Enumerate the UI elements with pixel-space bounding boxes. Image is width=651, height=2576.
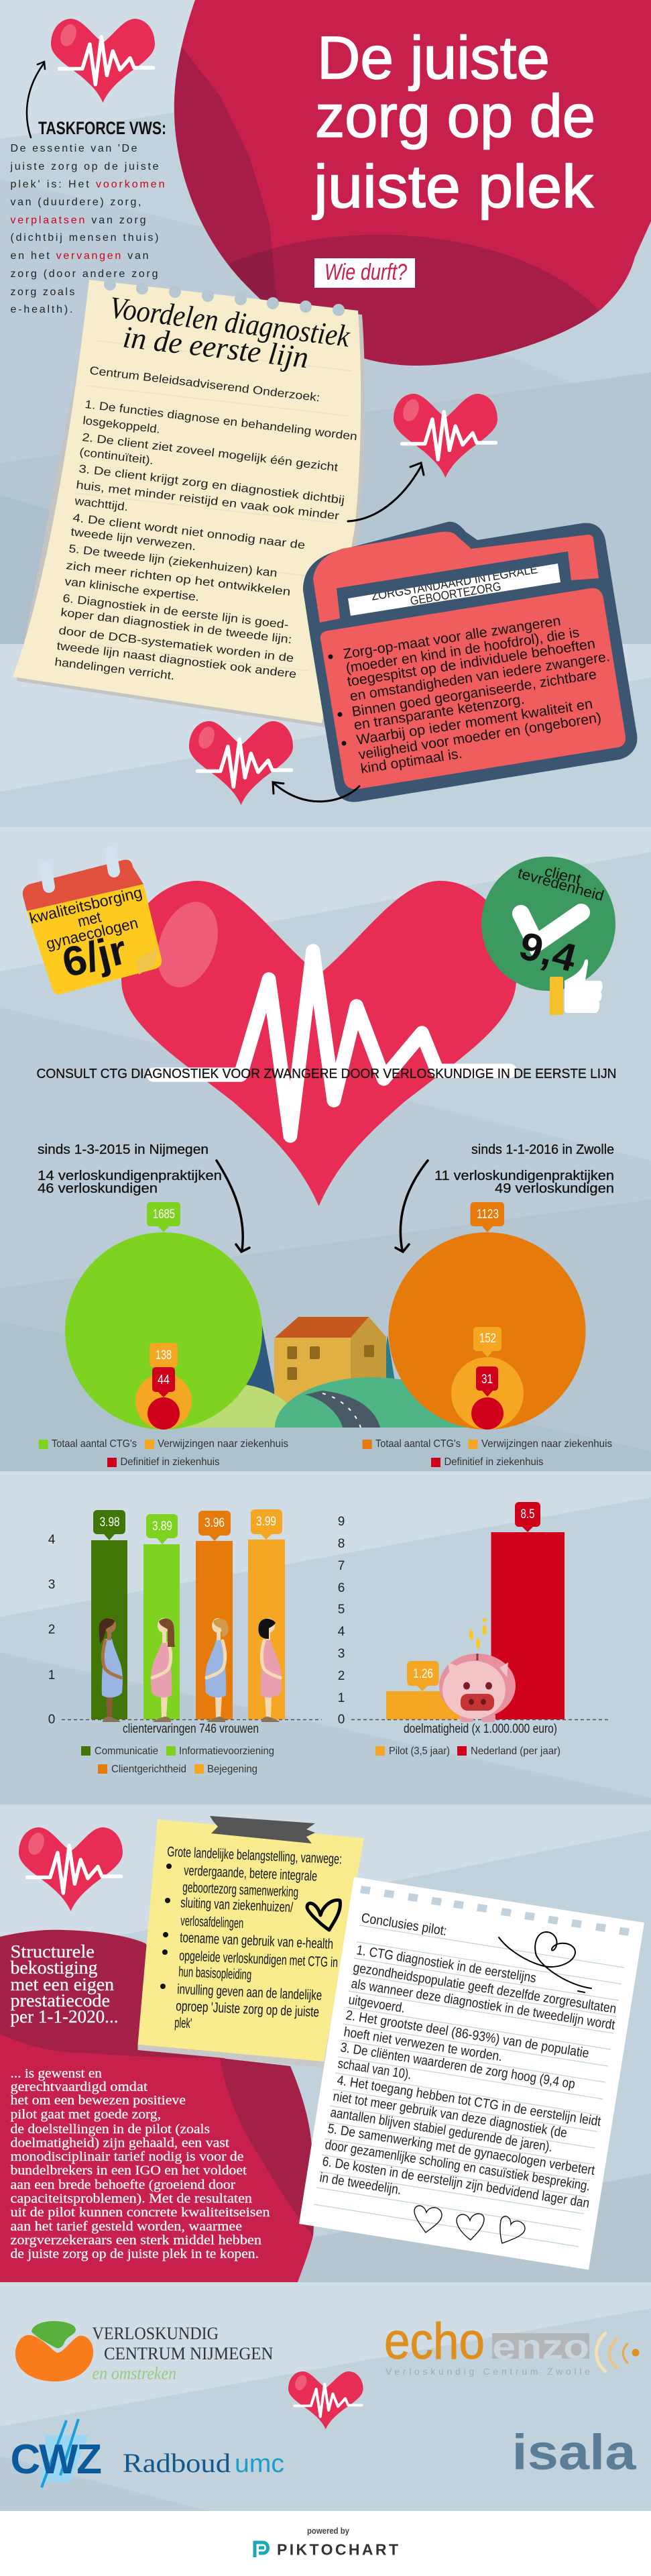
icon: pregnant woman 1	[99, 1618, 123, 1722]
section 3 background	[0, 1471, 651, 1805]
big heart	[121, 881, 516, 1206]
tooltip 3.98: 3.98	[100, 1515, 120, 1529]
text block: voordelen list: 3. De client krijgt zorg en diagnostiek dichtbij	[78, 462, 345, 506]
icon: heart top	[51, 19, 155, 103]
folder bullet text: Waarbij op ieder moment kwaliteit en	[355, 696, 594, 748]
text block: is gewenst: zorgverzekeraars een sterk middel hebben	[11, 2233, 261, 2248]
text block: taskforce: De essentie van 'De	[11, 143, 137, 154]
note text: oproep 'Juiste zorg op de juiste	[176, 1998, 320, 2020]
heading: structurele bekostiging: met een eigen	[11, 1974, 115, 1994]
tooltip 152: 152	[479, 1332, 496, 1346]
folder bullet text: Zorg-op-maat voor alle zwangeren	[342, 613, 562, 662]
conclusies text: Conclusies pilot:	[360, 1911, 448, 1939]
logo: radboudumc: umc	[235, 2450, 284, 2478]
text block: voordelen list: 2. De client ziet zoveel mogelijk één gezicht	[82, 431, 339, 474]
note text: plek'	[174, 2015, 192, 2031]
tear squares	[360, 1886, 630, 1936]
title: De juiste	[317, 25, 550, 92]
heading: voordelen: Voordelen diagnostiek	[108, 290, 353, 354]
button: wie durft	[314, 258, 415, 288]
icon: pregnant woman 4	[258, 1618, 282, 1722]
icon: calendar kwaliteitsborging	[23, 852, 162, 995]
tooltip 138	[150, 1343, 178, 1373]
legend: zwolle: Totaal aantal CTG's	[375, 1438, 461, 1450]
legend: zwolle	[363, 1438, 612, 1468]
conclusies text: als wanneer deze diagnostiek in de tweedelijn wordt	[350, 1976, 616, 2033]
text block: voordelen list: wachttijd.	[73, 494, 129, 513]
folder label: ZORGSTANDAARD INTEGRALE	[370, 562, 538, 603]
text block: taskforce	[9, 143, 165, 315]
tooltip 1685	[147, 1202, 180, 1232]
axis: 1	[338, 1691, 345, 1705]
title: zorg op de	[315, 83, 595, 150]
tooltip 1123	[471, 1202, 504, 1232]
axis: 4	[48, 1533, 56, 1547]
paper holes	[104, 278, 345, 316]
logo: radboudumc	[123, 2448, 284, 2478]
text block: voordelen list: (continuïteit).	[79, 445, 154, 467]
section 5 background	[0, 2282, 651, 2511]
axis: 2	[48, 1623, 55, 1637]
section 4 background	[0, 1805, 651, 2282]
folder bullet text: en omstandigheden van iedere zwangere.	[349, 649, 611, 704]
conclusies text	[318, 1911, 617, 2211]
note text: sluiting van ziekenhuizen/	[180, 1895, 294, 1915]
note text: hun basisopleiding	[178, 1964, 252, 1983]
bars	[386, 1532, 565, 1719]
text block: nijmegen: sinds 1-3-2015 in Nijmegen	[38, 1142, 209, 1157]
arrow: note to heart	[348, 463, 424, 521]
axis: 6	[338, 1581, 345, 1595]
note text: geboortezorg samenwerking	[182, 1880, 299, 1900]
tooltip 3.99	[251, 1509, 282, 1540]
text block: voordelen list: losgekoppeld.	[82, 414, 161, 436]
calendar text: met	[76, 908, 103, 930]
tooltip 44: 44	[158, 1373, 170, 1387]
logo: verloskundig centrum nijmegen	[15, 2321, 274, 2383]
axis: 3	[48, 1578, 55, 1592]
text block: zwolle: 49 verloskundigen	[495, 1181, 614, 1196]
text block: is gewenst: de juiste zorg op de juiste plek in te kopen.	[11, 2247, 259, 2261]
note text: Grote landelijke belangstelling, vanwege:	[167, 1844, 343, 1867]
note text: opgeleide verloskundigen met CTG in	[179, 1948, 339, 1970]
tooltip 3.96	[198, 1511, 231, 1541]
section 1 background	[0, 0, 651, 827]
text block: is gewenst: monodisciplinair tarief nodig is voor de	[11, 2149, 244, 2164]
calendar text: gynaecologen	[44, 914, 139, 953]
legend: clientervaringen	[81, 1746, 274, 1775]
panel: structurele dark shape	[0, 1930, 228, 2063]
tooltip 1123: 1123	[477, 1208, 499, 1222]
conclusies text: hoeft niet verwezen te worden.	[343, 2025, 504, 2064]
axis: 5	[338, 1603, 345, 1617]
legend: nijmegen: Totaal aantal CTG's	[52, 1438, 137, 1450]
panel: yellow note	[138, 1816, 364, 2068]
text block: voordelen list: 4. De client wordt niet onnodig naar de	[72, 511, 306, 551]
bar chart: clientervaringen	[48, 1509, 322, 1775]
tooltip 3.96: 3.96	[204, 1516, 225, 1530]
legend: clientervaringen: Bejegening	[207, 1764, 257, 1775]
icon: pregnant woman 3	[205, 1618, 229, 1722]
arrow: nijmegen	[217, 1161, 249, 1252]
axis: 9	[338, 1515, 345, 1529]
arrow: to heart top	[27, 62, 45, 138]
tooltip 1.26: 1.26	[413, 1667, 433, 1681]
panel: folder zorgstandaard	[303, 522, 637, 802]
title	[312, 25, 595, 221]
text block: taskforce: zorg zoals	[11, 286, 75, 298]
folder bullet text	[329, 613, 611, 777]
tooltip 3.89	[146, 1514, 178, 1544]
arrow: folder to heart	[273, 782, 359, 802]
axis title: clientervaringen 746 vrouwen	[123, 1722, 259, 1736]
tooltip 31	[476, 1366, 498, 1397]
calendar text: kwaliteitsborging	[27, 883, 143, 927]
legend: zwolle: Verwijzingen naar ziekenhuis	[481, 1438, 612, 1450]
icon: client tevredenheid badge: tevredenheid	[516, 865, 606, 904]
conclusies text: 3. De cliënten waarderen de zorg hoog (9,4 op	[339, 2040, 576, 2092]
icon: piktochart logo	[255, 2542, 268, 2557]
conclusies text: aantallen blijven stabiel gedurende de jaren).	[329, 2105, 554, 2155]
text block: voordelen list: door de DCB-systematiek worden in de	[58, 624, 294, 665]
logo: echo enzo: Verloskundig Centrum Zwolle	[386, 2366, 590, 2377]
heading: structurele bekostiging: prestatiecode	[11, 1990, 110, 2010]
tooltip 8.5: 8.5	[520, 1507, 535, 1521]
note text: verlosafdelingen	[180, 1913, 244, 1931]
legend: clientervaringen: Informatievoorziening	[179, 1746, 274, 1757]
legend: doelmatigheid	[375, 1746, 560, 1757]
heading: taskforce: TASKFORCE VWS:	[38, 118, 166, 138]
text block: taskforce: juiste zorg op de juiste	[9, 161, 159, 172]
legend: clientervaringen: Clientgerichtheid	[111, 1764, 186, 1775]
text block: is gewenst: uit de pilot kunnen concrete kwaliteitseisen	[11, 2205, 270, 2220]
icon: client tevredenheid badge: client	[543, 863, 583, 888]
text block: taskforce: (dichtbij mensen thuis)	[11, 232, 158, 244]
heading: consult ctg: CONSULT CTG DIAGNOSTIEK VOOR ZWANGERE DOOR VERLOSKUNDIGE IN DE EERSTE LIJN	[36, 1067, 617, 1081]
axis: 0	[48, 1713, 55, 1727]
panel: note voordelen	[13, 278, 365, 727]
chart: nijmegen bubbles	[65, 1202, 262, 1430]
text block: voordelen list: koper dan diagnostiek in de tweede lijn:	[60, 606, 292, 646]
text block: taskforce: en het vervangen van	[11, 250, 149, 262]
bar chart: doelmatigheid	[338, 1502, 611, 1757]
legend: doelmatigheid: Nederland (per jaar)	[471, 1746, 560, 1757]
folder bullet text: en transparante ketenzorg.	[353, 692, 526, 733]
legend: nijmegen	[39, 1438, 288, 1468]
axis: 7	[338, 1559, 345, 1573]
folder bullet text: (moeder en kind in de hoofdrol), die is	[345, 625, 581, 676]
text block: nijmegen	[38, 1142, 222, 1196]
arrow: zwolle	[396, 1161, 428, 1252]
calendar text	[27, 883, 143, 987]
panel: conclusies white note	[299, 1877, 644, 2270]
legend: nijmegen: Definitief in ziekenhuis	[121, 1456, 220, 1468]
axis: 2	[338, 1669, 345, 1683]
icon: three outline hearts	[414, 2206, 525, 2243]
axis: 1	[48, 1668, 55, 1682]
text block: zwolle: sinds 1-1-2016 in Zwolle	[471, 1142, 614, 1157]
tooltip 44	[152, 1367, 175, 1397]
text block: nijmegen: 46 verloskundigen	[38, 1181, 158, 1196]
text block: voordelen list: zich meer richten op het ontwikkelen	[66, 559, 291, 598]
text block: is gewenst: aan een brede behoefte (groeiend door	[11, 2178, 235, 2192]
axis: 0	[338, 1713, 345, 1727]
axis	[48, 1533, 56, 1727]
text block: is gewenst: de doelstellingen in de pilot (zoals	[11, 2122, 210, 2137]
tooltip 3.89: 3.89	[152, 1519, 172, 1534]
folder label	[347, 553, 567, 627]
folder bullet text: Binnen goed georganiseerde, zichtbare	[351, 667, 597, 720]
icon: heart logos	[288, 2371, 363, 2429]
calendar text: 6/jr	[58, 926, 131, 987]
conclusies text: door gezamenlijke scholing en casuïstiek bespreking.	[324, 2137, 591, 2194]
tooltip 31: 31	[481, 1373, 493, 1387]
axis	[338, 1515, 345, 1727]
text block: is gewenst: aan het tarief gesteld worden, waarmee	[11, 2219, 242, 2234]
icon: pregnant woman 2	[151, 1618, 175, 1722]
text block: taskforce: e-health).	[11, 304, 72, 315]
legend: clientervaringen: Communicatie	[95, 1746, 158, 1757]
text block: zwolle	[434, 1142, 614, 1196]
illustration: village	[158, 1311, 469, 1428]
text block: is gewenst: het om een bewezen positieve	[11, 2093, 186, 2108]
conclusies text: schaal van 10).	[337, 2056, 412, 2082]
logo: isala: isala	[512, 2424, 636, 2480]
axis: 4	[338, 1625, 345, 1639]
text block: is gewenst: ... is gewenst en	[11, 2066, 102, 2081]
logo: verloskundig centrum nijmegen: CENTRUM NIJMEGEN	[104, 2344, 274, 2363]
heading: structurele bekostiging	[11, 1941, 118, 2027]
footer: powered by	[307, 2526, 350, 2536]
logo: cwz	[11, 2419, 102, 2487]
text block: voordelen list: huis, met minder reistijd en vaak ook minder	[76, 478, 340, 523]
icon: client tevredenheid badge: 9,4	[515, 924, 581, 981]
text block: voordelen list: tweede lijn verwezen.	[70, 525, 196, 553]
folder bullet text: toegespitst op de individuele behoeften	[346, 636, 596, 690]
axis title: doelmatigheid (x 1.000.000 euro)	[404, 1722, 557, 1736]
text block: taskforce: van (duurdere) zorg,	[11, 197, 141, 208]
axis: 3	[338, 1647, 345, 1661]
conclusies text: 6. De kosten in de eerstelijn zijn bedvidend lager dan	[321, 2154, 591, 2211]
folder bullet text: kind optimaal is.	[359, 746, 463, 777]
footer	[0, 2511, 651, 2576]
tooltip 1685: 1685	[153, 1208, 175, 1222]
panel: bekostiging red shape	[0, 2034, 314, 2282]
text block: nijmegen: 14 verloskundigenpraktijken	[38, 1169, 222, 1183]
text block: is gewenst: capaciteitsproblemen). Met de resultaten	[11, 2191, 252, 2206]
text block: taskforce: zorg (door andere zorg	[11, 268, 158, 280]
legend: zwolle: Definitief in ziekenhuis	[444, 1456, 543, 1468]
title: juiste plek	[312, 154, 594, 221]
text block: voordelen list: 6. Diagnostiek in de eerste lijn is goed-	[62, 592, 289, 631]
axis: 8	[338, 1537, 345, 1551]
section 2 background	[0, 827, 651, 1471]
text block: zwolle: 11 verloskundigenpraktijken	[434, 1169, 614, 1183]
text block: voordelen list: 5. De tweede lijn (ziekenhuizen) kan	[68, 542, 278, 580]
icon: heart section 4	[19, 1827, 123, 1911]
red shape overlay	[220, 2058, 314, 2236]
bars	[91, 1540, 285, 1719]
folder bullet text: veiligheid voor moeder en (ongeboren)	[357, 710, 602, 763]
logo: echo enzo: echo	[384, 2313, 485, 2370]
logo: cwz: CWZ	[11, 2436, 102, 2483]
icon: client tevredenheid badge	[481, 857, 615, 1015]
legend: nijmegen: Verwijzingen naar ziekenhuis	[158, 1438, 288, 1450]
text block: is gewenst: pilot gaat met goede zorg,	[11, 2107, 161, 2122]
conclusies text: gezondheidspopulatie geeft dezelfde zorgresultaten	[352, 1960, 617, 2017]
icon: heart right	[394, 394, 497, 478]
text block: voordelen list: Centrum Beleidsadviserend Onderzoek:	[89, 364, 320, 404]
tooltip 3.98	[93, 1510, 125, 1540]
heading: structurele bekostiging: bekostiging	[11, 1957, 98, 1978]
heading: structurele bekostiging: Structurele	[11, 1941, 95, 1962]
note text: invulling geven aan de landelijke	[177, 1982, 322, 2003]
text block: is gewenst: bundelbrekers in een IGO en het voldoet	[11, 2163, 247, 2178]
heading: voordelen: in de eerste lijn	[121, 319, 310, 374]
icon: heart lower	[189, 721, 293, 805]
button: wie durft: Wie durft?	[324, 260, 407, 285]
text block: is gewenst: gerechtvaardigd omdat	[11, 2080, 147, 2094]
tooltip 138: 138	[156, 1348, 172, 1362]
icon: scribble heart	[307, 1900, 340, 1930]
tooltip 1.26	[407, 1661, 438, 1691]
heading: structurele bekostiging: per 1-1-2020...	[11, 2006, 118, 2027]
text block: taskforce: verplaatsen van zorg	[11, 215, 146, 226]
logo: verloskundig centrum nijmegen: en omstreken	[93, 2364, 176, 2383]
title panel: red shape	[174, 0, 651, 366]
note text: verdergaande, betere integrale	[184, 1863, 318, 1884]
logo: verloskundig centrum nijmegen: VERLOSKUNDIG	[93, 2324, 219, 2343]
footer: PIKTOCHART	[277, 2541, 398, 2559]
conclusies text: 2. Het grootste deel (86-93%) van de populatie	[345, 2008, 590, 2061]
folder label: GEBOORTEZORG	[409, 580, 502, 608]
icon: piggy bank	[439, 1618, 516, 1722]
chart: zwolle bubbles	[389, 1202, 586, 1430]
conclusies text: in de tweedelijn.	[318, 2170, 402, 2198]
tooltip 8.5	[515, 1502, 540, 1532]
bullets	[160, 1864, 172, 1989]
text block: is gewenst	[11, 2066, 270, 2261]
conclusies text: 5. De samenwerking met de gynaecologen verbetert	[327, 2121, 596, 2178]
icon: thumb up	[550, 959, 603, 1015]
conclusies text: uitgevoerd.	[347, 1992, 406, 2016]
legend: doelmatigheid: Pilot (3,5 jaar)	[389, 1746, 450, 1757]
text block: voordelen list: tweede lijn naast diagnostiek ook andere	[56, 639, 297, 681]
conclusies text: niet tot meer gebruik van deze diagnostiek (de	[332, 2089, 568, 2141]
conclusies text: 4. Het toegang hebben tot CTG in de eerstelijn leidt	[336, 2073, 602, 2129]
tooltip 152	[473, 1327, 501, 1357]
text block: is gewenst: doelmatigheid) zijn gehaald, een vast	[11, 2136, 229, 2151]
logo: echo enzo	[384, 2313, 640, 2377]
icon: swirl heart	[499, 1932, 591, 1992]
tape	[210, 1816, 315, 1843]
text block: voordelen list: 1. De functies diagnose en behandeling worden	[84, 398, 358, 443]
text block: voordelen list	[54, 364, 358, 682]
tooltip 3.99: 3.99	[256, 1515, 276, 1529]
text block: voordelen list: handelingen verricht.	[54, 655, 176, 682]
text block: voordelen list: van klinische expertise.	[64, 575, 200, 604]
conclusies text: 1. CTG diagnostiek in de eerstelijns	[355, 1943, 537, 1986]
text block: taskforce: plek' is: Het voorkomen	[11, 178, 165, 191]
note text	[167, 1844, 343, 2031]
note text: toename van gebruik van e-health	[180, 1930, 334, 1952]
logo: radboudumc: Radboud	[123, 2448, 231, 2478]
logo: echo enzo: enzo	[492, 2328, 589, 2367]
